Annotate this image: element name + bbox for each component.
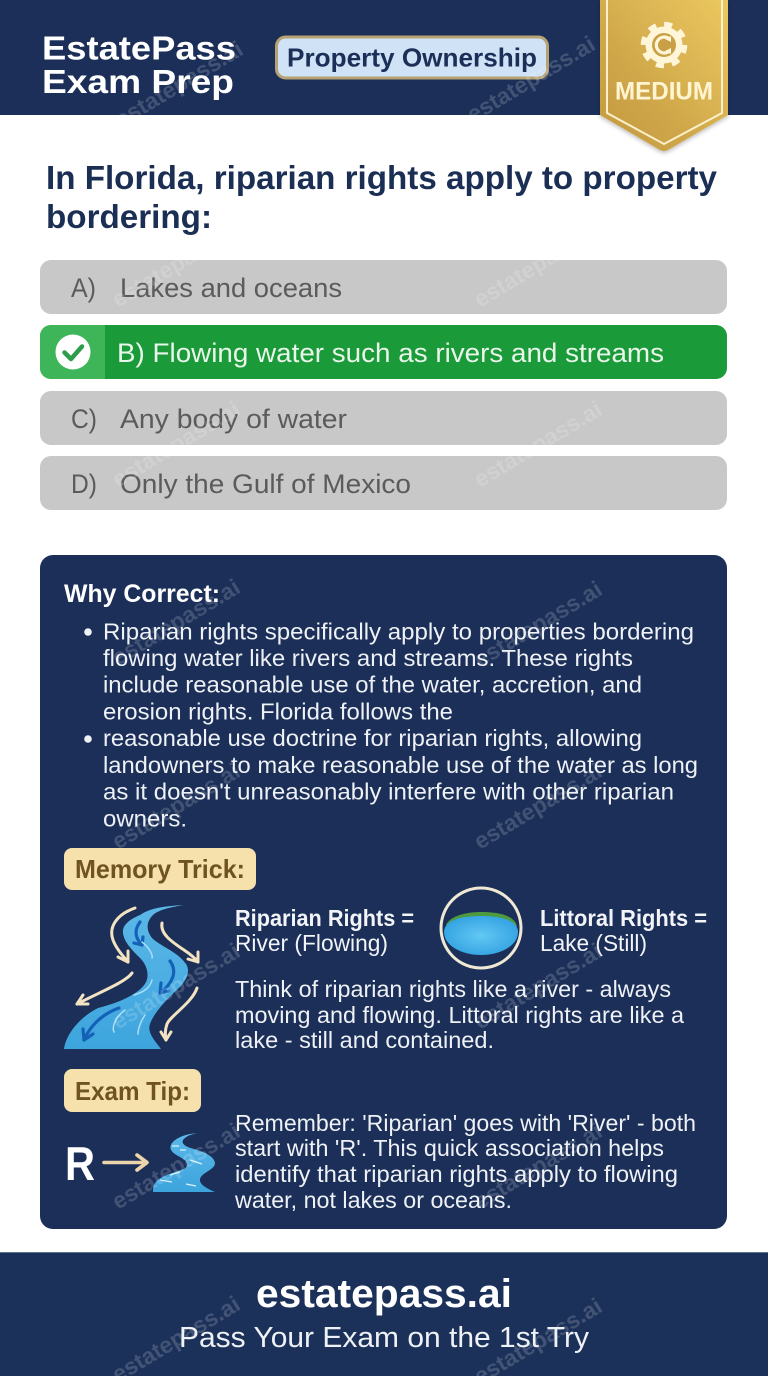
question heading: bordering:: [46, 198, 212, 235]
option A: Lakes and oceans: [120, 273, 342, 303]
option B correct: [40, 325, 727, 379]
option A: [40, 260, 727, 314]
question heading: [46, 159, 718, 235]
footer: estatepass.ai: [256, 1272, 512, 1316]
exam tip text: water, not lakes or oceans.: [234, 1187, 512, 1213]
option C: Any body of water: [120, 404, 347, 434]
bullet list: as it doesn't unreasonably interfere with other riparian: [103, 778, 674, 804]
bullet list: include reasonable use of the water, accretion, and: [103, 672, 642, 698]
option C: C): [71, 404, 97, 434]
panel: explanation: [40, 555, 727, 1229]
difficulty ribbon: [600, 0, 728, 151]
option B correct: B) Flowing water such as rivers and streams: [117, 338, 664, 368]
bullet list: reasonable use doctrine for riparian rights, allowing: [103, 725, 642, 751]
option D: [40, 456, 727, 510]
exam tip badge: [64, 1069, 201, 1112]
memory trick text: [235, 976, 685, 1053]
icon: flowing river: [64, 905, 198, 1049]
option A: A): [71, 273, 96, 303]
memory trick badge: [64, 848, 256, 890]
memory trick text: Think of riparian rights like a river - always: [235, 976, 671, 1002]
memory trick text: moving and flowing. Littoral rights are like a: [235, 1002, 685, 1028]
icon: gear: [644, 24, 684, 66]
category pill: [276, 37, 548, 78]
footer: Pass Your Exam on the 1st Try: [179, 1322, 590, 1354]
exam tip text: [234, 1110, 696, 1213]
exam tip text: start with 'R'. This quick association helps: [235, 1135, 664, 1161]
option D: D): [71, 469, 97, 499]
watermarks: estatepass.ai: [469, 576, 606, 672]
watermarks: estatepass.ai: [107, 938, 244, 1034]
watermarks: [107, 31, 606, 1376]
exam tip text: Remember: 'Riparian' goes with 'River' - both: [235, 1110, 696, 1136]
difficulty ribbon: MEDIUM: [615, 78, 713, 106]
footer: [0, 1252, 768, 1376]
option D: Only the Gulf of Mexico: [120, 469, 411, 499]
watermarks: estatepass.ai: [462, 31, 599, 127]
bullet list: landowners to make reasonable use of the water as long: [103, 752, 698, 778]
watermarks: estatepass.ai: [107, 574, 244, 670]
riparian rights label: River (Flowing): [235, 930, 388, 956]
icon: still lake: [441, 888, 521, 968]
header logo text: EstatePass: [42, 30, 236, 68]
arrow: [104, 1155, 147, 1170]
header band: [0, 0, 768, 115]
riparian rights label: Riparian Rights =: [235, 905, 414, 931]
watermarks: estatepass.ai: [469, 1118, 606, 1214]
watermarks: estatepass.ai: [469, 938, 606, 1034]
header logo text: [42, 30, 236, 101]
littoral rights label: Lake (Still): [540, 930, 647, 956]
bullet list: Riparian rights specifically apply to properties bordering: [103, 618, 694, 644]
bullet list: erosion rights. Florida follows the: [103, 698, 453, 724]
icon: small river: [153, 1133, 215, 1192]
icon: letter R to river: R: [65, 1137, 95, 1190]
watermarks: estatepass.ai: [469, 216, 606, 312]
watermarks: estatepass.ai: [107, 1118, 244, 1214]
exam tip badge: Exam Tip:: [75, 1076, 190, 1106]
icon: letter R to river: [65, 1133, 215, 1192]
littoral rights label: [540, 905, 707, 956]
memory trick badge: Memory Trick:: [75, 854, 245, 884]
watermarks: estatepass.ai: [110, 36, 247, 132]
watermarks: estatepass.ai: [469, 396, 606, 492]
memory trick text: lake - still and contained.: [235, 1027, 494, 1053]
riparian rights label: [235, 905, 414, 956]
header logo text: Exam Prep: [42, 64, 234, 101]
icon: check mark: [56, 334, 90, 370]
watermarks: estatepass.ai: [107, 396, 244, 492]
why correct heading: Why Correct:: [64, 580, 220, 608]
watermarks: estatepass.ai: [107, 758, 244, 854]
watermarks: estatepass.ai: [469, 758, 606, 854]
littoral rights label: Littoral Rights =: [540, 905, 707, 931]
bullet list: owners.: [103, 806, 187, 832]
category pill: Property Ownership: [287, 42, 537, 72]
option C: [40, 391, 727, 445]
bullet list: [84, 618, 698, 832]
exam tip text: identify that riparian rights apply to flowing: [235, 1161, 678, 1187]
watermarks: estatepass.ai: [107, 216, 244, 312]
bullet list: flowing water like rivers and streams. These rights: [103, 645, 633, 671]
question heading: In Florida, riparian rights apply to property: [46, 159, 718, 196]
